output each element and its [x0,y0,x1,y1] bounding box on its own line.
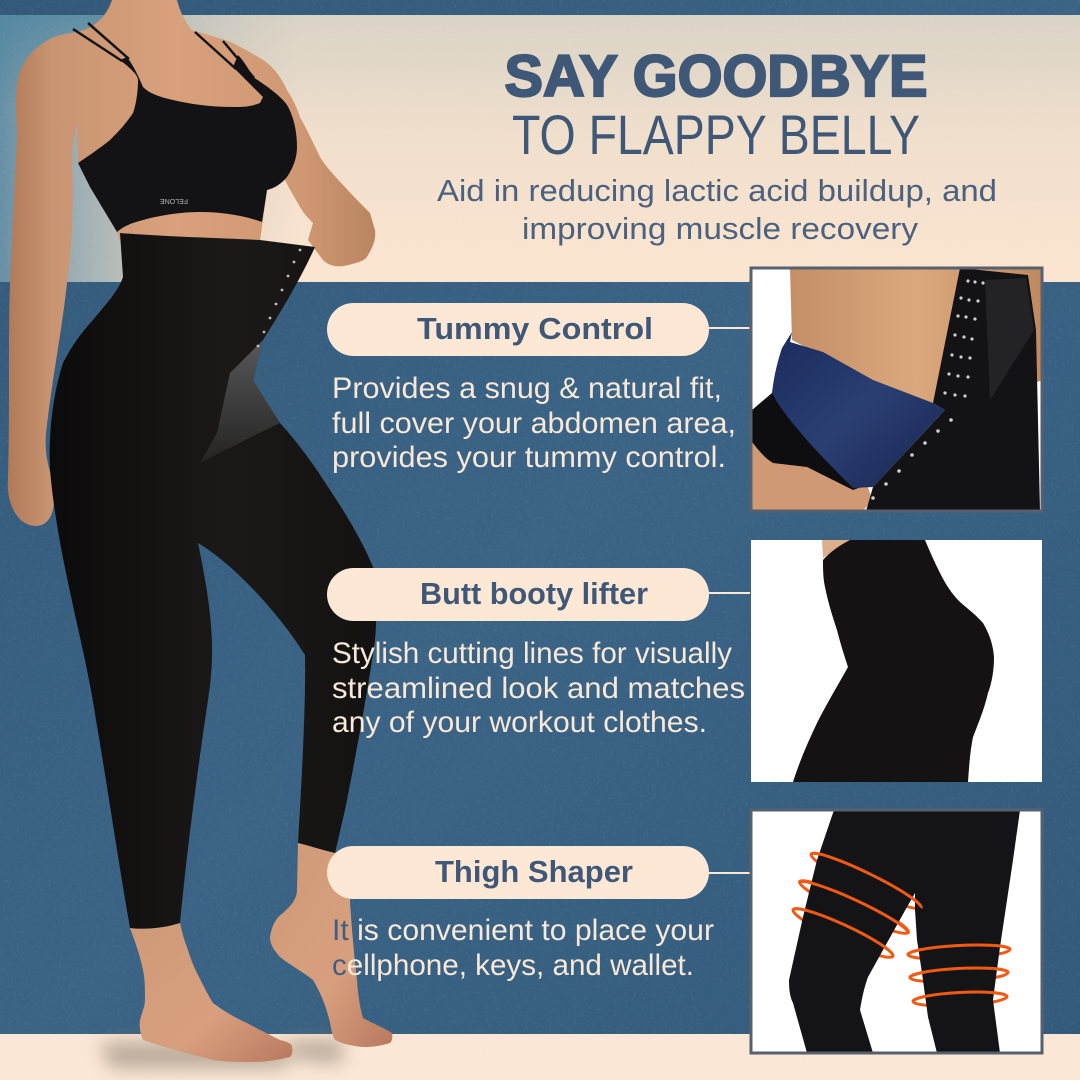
photo frame [751,810,1042,1053]
pill heading [327,303,750,356]
description: Stylish cutting lines for visually [332,637,732,670]
ring backs [790,847,1010,1008]
leggings [789,810,1020,1053]
hook rows [871,279,985,500]
feature: tummy control [327,268,1042,511]
pill heading [327,568,750,621]
bottom cream floor band [0,1034,1080,1080]
sheen on black panel [985,278,1034,400]
raised foot [270,843,392,1047]
bra logo: FELONE [160,197,188,204]
description [332,914,714,982]
pill heading: Tummy Control [417,311,653,346]
left thigh skin [751,440,872,511]
subtitle: improving muscle recovery [522,211,919,246]
top cream band [0,15,1080,282]
heading line 1: SAY GOODBYE [504,44,928,109]
heading line 2: TO FLAPPY BELLY [512,103,920,166]
description: provides your tummy control. [332,441,726,474]
photo: thigh rings [751,810,1042,1053]
sports bra [73,23,297,232]
floor shadows [100,1040,345,1068]
ring fronts [793,853,1010,1002]
description: any of your workout clothes. [332,706,707,739]
description: Provides a snug & natural fit, [332,372,722,405]
description: streamlined look and matches [332,672,745,705]
navy lining [772,332,945,488]
pill heading: Thigh Shaper [435,854,633,889]
description [332,372,736,474]
black panel with hooks [866,268,1040,511]
pill heading: Butt booty lifter [420,576,648,611]
description: cellphone, keys, and wallet. [332,949,694,982]
belly skin [790,268,1042,420]
subtitle: Aid in reducing lactic acid buildup, and [437,173,997,208]
skin: neck, shoulders, arms and torso [8,0,375,526]
hook strip [257,249,301,347]
description [332,637,745,739]
feature: butt booty lifter [327,540,1042,782]
grey waistband lining [200,340,280,463]
standing foot [130,923,292,1062]
photo: waistband hooks [751,268,1042,511]
subtitle [437,173,997,246]
title [504,44,928,166]
photo frame [751,268,1042,511]
pill heading [327,846,750,899]
thin bra straps [73,23,254,78]
description: full cover your abdomen area, [332,407,736,440]
description: It is convenient to place your [332,914,714,947]
photo: rear view leggings [751,540,1042,782]
leggings [50,233,376,929]
black left panel [752,348,880,490]
model figure [8,0,392,1068]
feature: thigh shaper [327,810,1042,1053]
